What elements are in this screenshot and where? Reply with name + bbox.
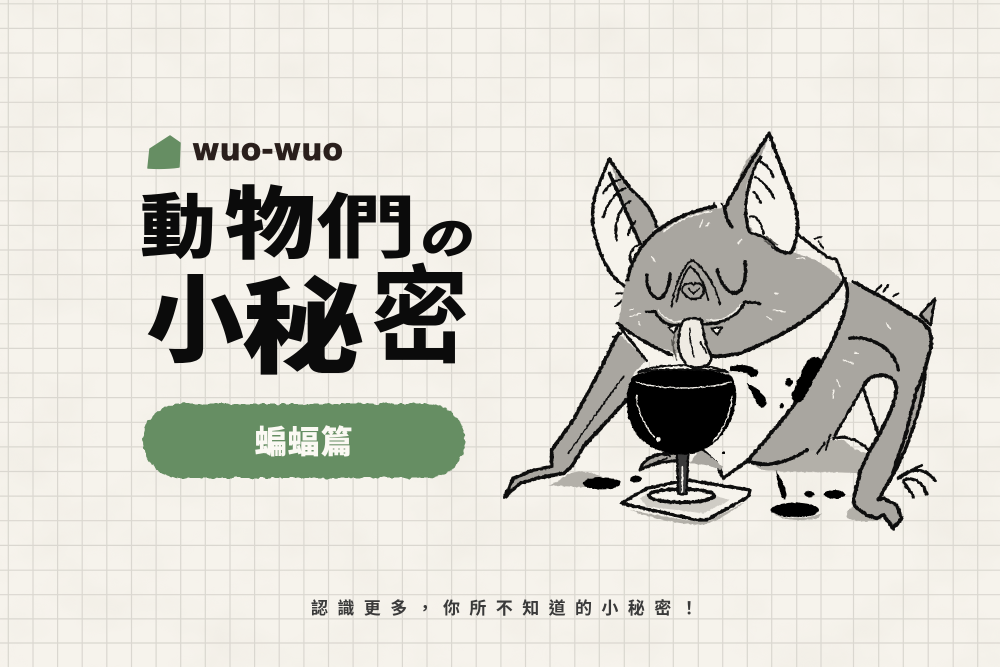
bat foot behind glass (640, 448, 723, 470)
rim (638, 365, 728, 373)
ink splatters (583, 357, 845, 517)
right spine spike (920, 298, 935, 325)
pill label: 蝙蝠篇 (254, 424, 354, 460)
title: 動 (140, 189, 216, 267)
title: 小 (146, 269, 244, 375)
left arm (505, 323, 677, 497)
bat body (748, 282, 931, 528)
title: 密 (371, 259, 469, 377)
fur highlights (630, 220, 805, 325)
highlights (636, 382, 732, 442)
fangs (668, 325, 678, 333)
mouth (647, 302, 760, 325)
nose (672, 260, 720, 307)
bowl (627, 370, 736, 454)
icon: green house (148, 136, 180, 168)
title (140, 182, 479, 387)
title: の (417, 215, 479, 264)
stem (677, 452, 688, 494)
pill shape (143, 404, 465, 478)
subtitle pill (143, 404, 465, 478)
eyes (647, 262, 745, 299)
body outlines (700, 279, 931, 528)
illustration: bat drinking from a glass (505, 133, 935, 528)
tongue (672, 318, 711, 368)
right ear (725, 133, 798, 253)
right rear wing and foot (892, 362, 935, 497)
left ear (592, 159, 657, 307)
wine glass (627, 365, 736, 494)
title: 秘 (242, 271, 364, 387)
logo: house icon and wordmark (148, 133, 343, 168)
coaster (622, 480, 750, 520)
title: 們 (316, 188, 416, 268)
footer tagline: 認識更多，你所不知道的小秘密！ (311, 598, 707, 618)
face (630, 220, 890, 398)
title: 物 (224, 182, 316, 270)
wordmark: wuo-wuo (192, 133, 343, 168)
head (618, 203, 844, 357)
ground shadows (548, 440, 883, 525)
